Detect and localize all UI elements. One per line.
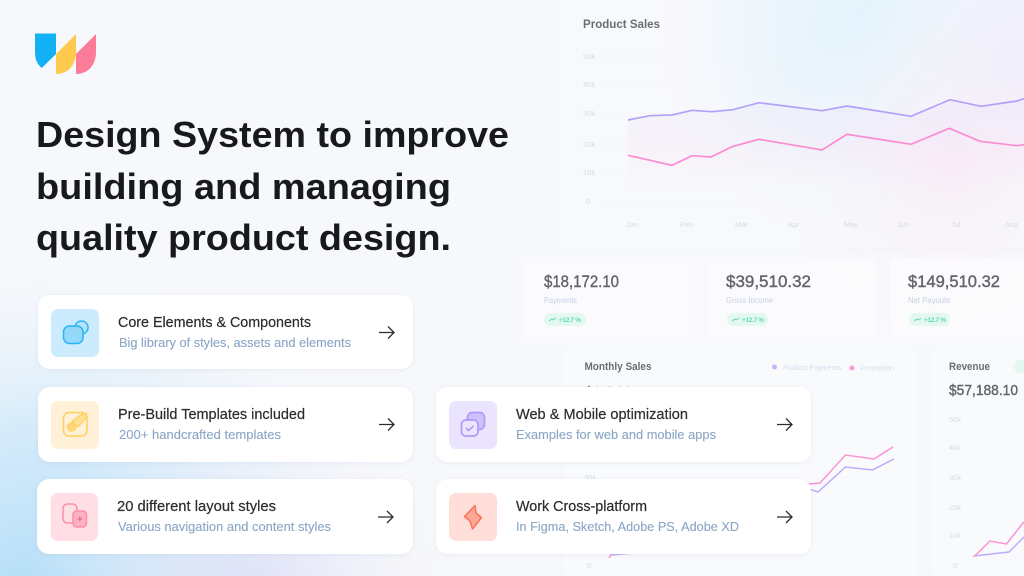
stat: payments: $18,172.10 bbox=[544, 272, 619, 291]
arrow bbox=[379, 326, 394, 338]
arrow bbox=[777, 418, 792, 430]
title: quality product design. bbox=[36, 217, 451, 258]
panel: stat cards bbox=[518, 253, 1024, 345]
stat: gross income: Gross Income bbox=[726, 296, 774, 305]
line: purple series bbox=[610, 459, 894, 555]
line: pink series bbox=[974, 522, 1024, 557]
card: cross-platform: In Figma, Sketch, Adobe PS, Adobe XD bbox=[516, 519, 739, 534]
icon: lightning bolt bbox=[449, 493, 497, 541]
y axis labels: 20k bbox=[583, 140, 595, 149]
stat: payments: Payments bbox=[544, 296, 577, 305]
x axis month labels: Jan bbox=[626, 220, 638, 229]
panel: revenue chart: 20k bbox=[949, 503, 961, 512]
line: pink series bbox=[628, 128, 1024, 165]
panel: monthly sales chart bbox=[564, 347, 917, 576]
card: templates bbox=[38, 387, 413, 462]
arrow bbox=[379, 418, 394, 430]
y axis labels: 0 bbox=[586, 197, 590, 206]
arrow bbox=[378, 511, 393, 523]
stat: net payouts bbox=[890, 258, 1024, 337]
panel: monthly sales chart: $1,844 bbox=[584, 384, 630, 401]
panel: revenue chart: 0 bbox=[953, 561, 957, 570]
icon: paint brush bbox=[51, 401, 99, 449]
logo bbox=[35, 34, 96, 74]
panel: revenue chart: 10k bbox=[949, 531, 961, 540]
stat: net payouts: $149,510.32 bbox=[908, 272, 1000, 291]
panel: monthly sales chart: Monthly Sales bbox=[584, 361, 652, 373]
stat: gross income: +12.7 % bbox=[742, 317, 764, 324]
line: purple series bbox=[974, 537, 1024, 556]
card: core elements bbox=[38, 295, 413, 369]
card: web and mobile: Examples for web and mobile apps bbox=[516, 427, 716, 442]
x axis month labels bbox=[626, 220, 1018, 229]
legend: Promotion bbox=[860, 364, 894, 372]
card: layout styles: 20 different layout styles bbox=[117, 499, 276, 515]
faded dashboard backdrop bbox=[518, 0, 1024, 576]
stat: gross income: $39,510.32 bbox=[726, 272, 811, 291]
stat: net payouts: Net Payouts bbox=[908, 296, 950, 305]
card: templates: 200+ handcrafted templates bbox=[119, 427, 281, 442]
stat: gross income bbox=[707, 258, 876, 337]
stat: payments bbox=[524, 258, 695, 337]
card: layout styles: Various navigation and content styles bbox=[118, 519, 331, 534]
panel: product sales chart bbox=[560, 0, 1024, 248]
x axis month labels: Feb bbox=[680, 220, 693, 229]
panel: revenue chart: Revenue bbox=[949, 361, 990, 373]
legend: Product Payments bbox=[783, 363, 841, 372]
card: templates: Pre-Build Templates included bbox=[118, 407, 305, 423]
legend bbox=[772, 363, 894, 372]
panel: revenue chart: 30k bbox=[949, 473, 961, 482]
stat: net payouts: +12.7 % bbox=[924, 317, 946, 324]
panel: revenue chart bbox=[932, 347, 1024, 576]
arrow bbox=[777, 511, 792, 523]
y axis labels: 50k bbox=[583, 52, 595, 61]
x axis month labels: Jul bbox=[951, 220, 961, 229]
panel: monthly sales chart: 30k bbox=[584, 473, 596, 482]
x axis month labels: Mar bbox=[735, 220, 748, 229]
y axis labels: 30k bbox=[583, 109, 595, 118]
title bbox=[36, 114, 509, 258]
area under lines bbox=[628, 99, 1024, 190]
card: layout styles bbox=[37, 479, 413, 554]
card: web and mobile: Web & Mobile optimization bbox=[516, 407, 688, 423]
card: cross-platform bbox=[436, 479, 811, 554]
icon: overlapping shapes bbox=[51, 309, 99, 357]
x axis month labels: Apr bbox=[788, 220, 800, 229]
x axis month labels: Jun bbox=[897, 220, 909, 229]
x axis month labels: Aug bbox=[1005, 220, 1018, 229]
panel: monthly sales chart: 0 bbox=[587, 561, 591, 570]
y axis labels: 40k bbox=[583, 80, 595, 89]
panel: revenue chart: $57,188.10 bbox=[949, 382, 1018, 399]
card: cross-platform: Work Cross-platform bbox=[516, 499, 647, 515]
panel: revenue chart: 50k bbox=[949, 415, 961, 424]
line: pink series bbox=[609, 447, 893, 558]
card: core elements: Big library of styles, assets and elements bbox=[119, 335, 351, 350]
y axis labels bbox=[583, 52, 595, 206]
card: web and mobile bbox=[436, 387, 811, 462]
title: building and managing bbox=[36, 166, 451, 207]
card: core elements: Core Elements & Components bbox=[118, 315, 311, 331]
x axis month labels: May bbox=[844, 220, 858, 229]
icon: layers with plus bbox=[50, 493, 98, 541]
line: purple series bbox=[628, 99, 1024, 120]
stat: payments: +12.7 % bbox=[559, 317, 581, 324]
icon: checked squares bbox=[449, 401, 497, 449]
chart heading: Product Sales: Product Sales bbox=[583, 17, 660, 31]
title: Design System to improve bbox=[36, 114, 509, 155]
y axis labels: 10k bbox=[583, 168, 595, 177]
panel: revenue chart: 40k bbox=[949, 443, 961, 452]
